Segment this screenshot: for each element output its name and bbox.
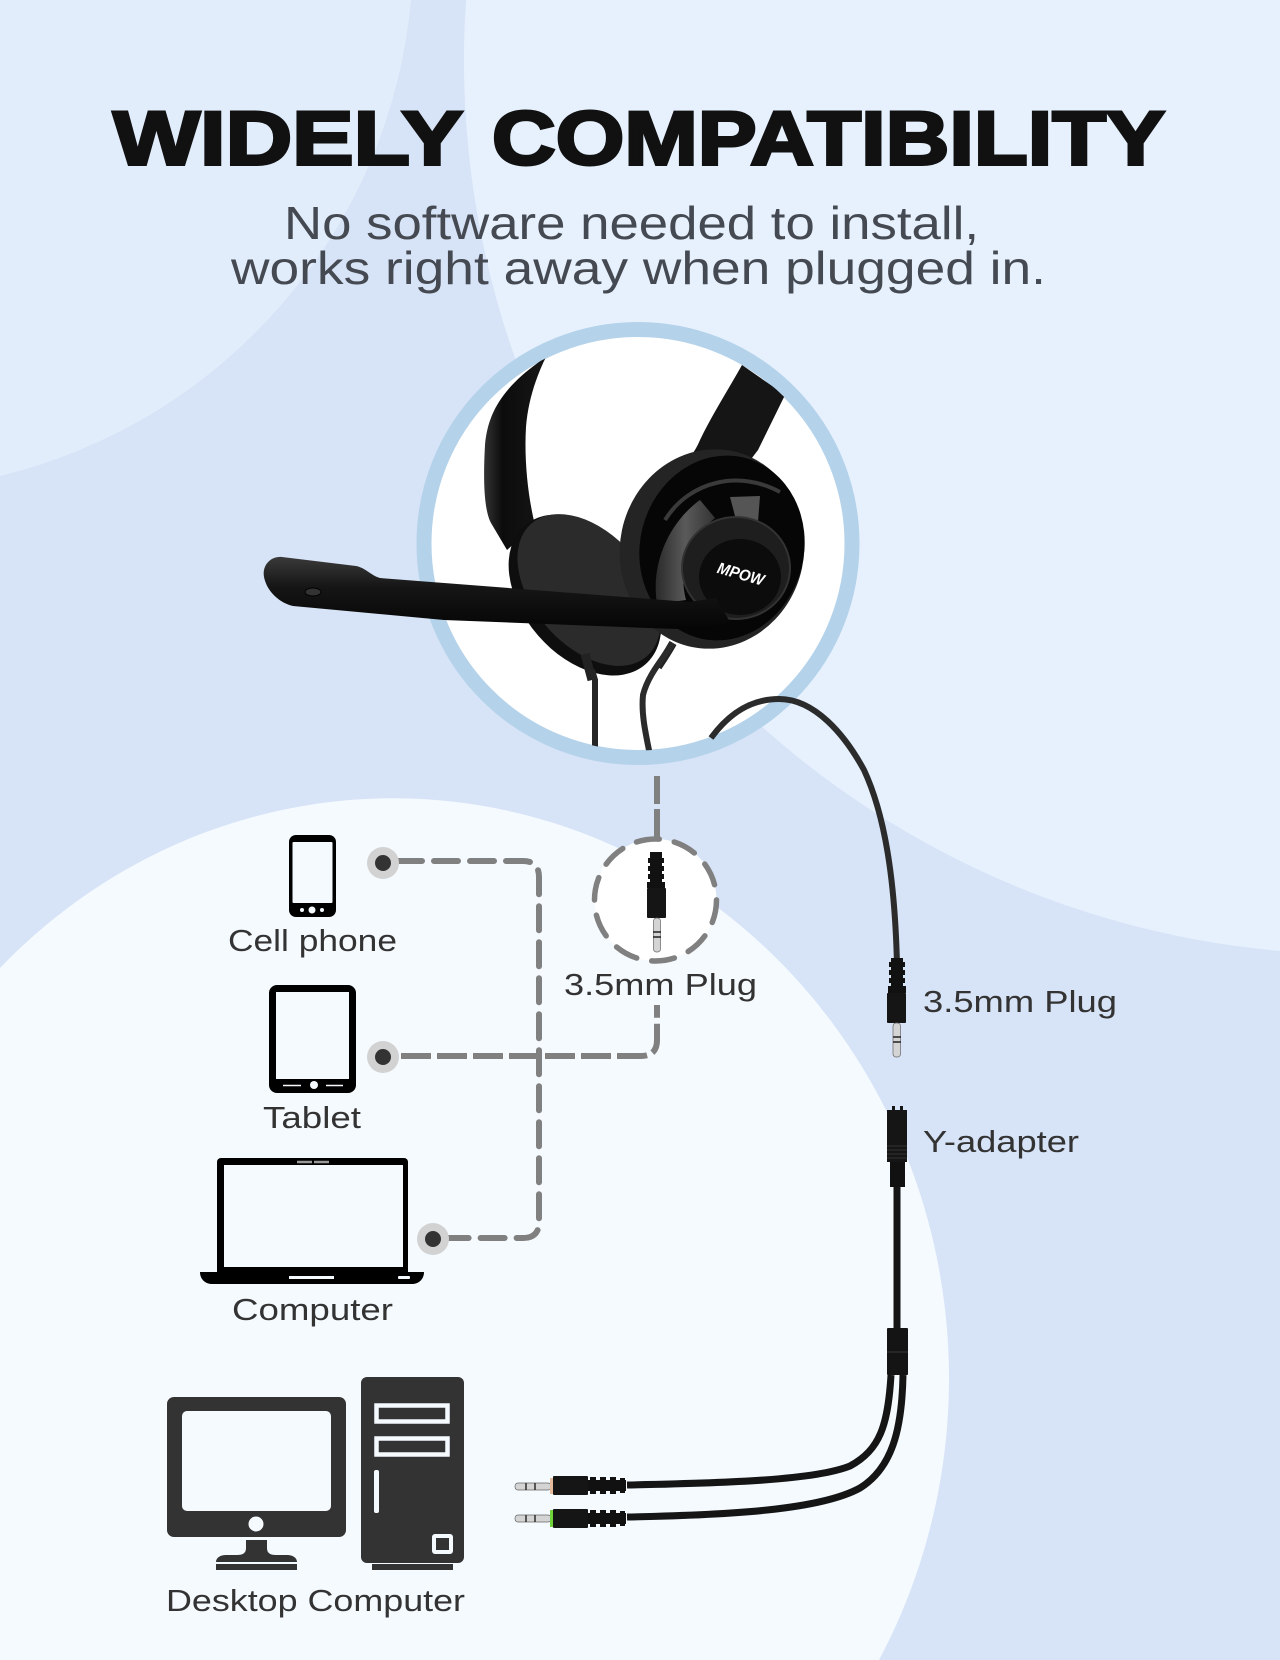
label: tablet: Tablet [263,1100,361,1135]
icon: desktop computer [167,1377,464,1570]
label: center plug: 3.5mm Plug [564,967,757,1002]
icon: laptop [200,1158,424,1284]
title: WIDELY [113,96,463,182]
split cables [627,1375,891,1485]
title: COMPATIBILITY [492,96,1165,182]
Y-adapter cable [515,1106,908,1528]
mic hole [305,588,321,596]
monitor [167,1397,346,1570]
jack [887,1106,907,1162]
icon: cell phone [289,835,336,917]
tower [361,1377,464,1570]
splitter [887,1328,908,1375]
dashed connection lines [398,861,657,1238]
right 3.5mm plug [887,958,906,1057]
headset long cable [711,699,897,965]
headset inside the circle [478,357,785,760]
label: right plug: 3.5mm Plug [923,984,1117,1019]
label: cell phone: Cell phone [228,923,397,958]
bottom plug [515,1509,626,1528]
connector: ring to plug [654,776,660,838]
subtitle: No software needed to install, [284,197,979,249]
logo: MPOW [715,560,768,590]
boom microphone [264,557,730,630]
top plug [515,1476,626,1495]
icon: tablet [269,985,356,1093]
subtitle: works right away when plugged in. [230,242,1046,294]
connector dots [367,847,449,1255]
title [113,96,1165,182]
label: Y-adapter: Y-adapter [923,1124,1079,1159]
strain relief [890,1162,905,1187]
ring [424,330,852,758]
label: desktop computer: Desktop Computer [166,1583,465,1618]
label: computer: Computer [232,1292,393,1327]
ear cup [601,432,824,666]
main cable [894,1187,900,1329]
headset image circle [264,330,852,760]
center 3.5mm plug circle [594,839,716,961]
subtitle [230,197,1046,294]
